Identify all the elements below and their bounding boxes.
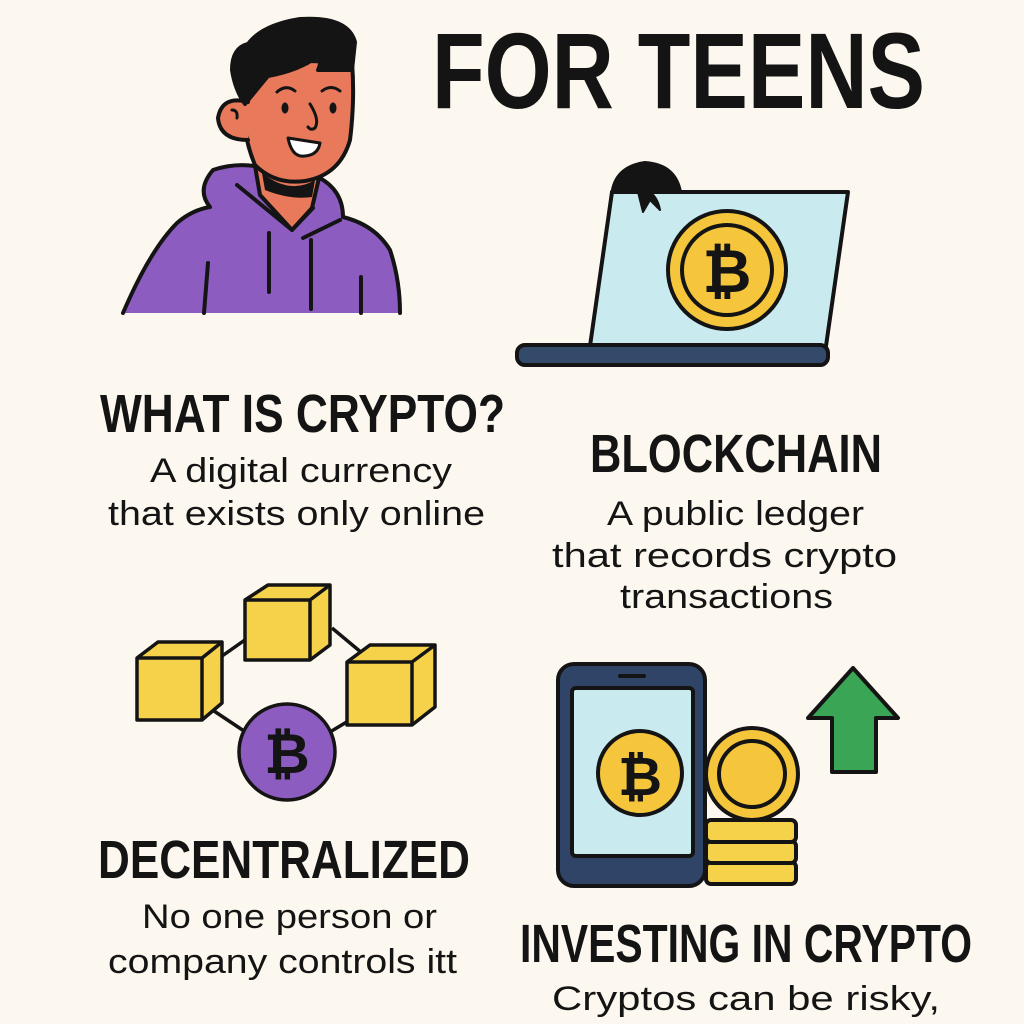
neck (254, 160, 322, 230)
heading: what is crypto: WHAT IS CRYPTO? (100, 384, 505, 444)
illustration: decentralized network: ₿ (264, 722, 310, 785)
text: blockchain: A public ledger (607, 495, 864, 533)
text: what is crypto (108, 452, 485, 533)
illustration: laptop with bitcoin (517, 163, 848, 365)
hair (232, 19, 355, 104)
ear (218, 100, 248, 140)
text: investing: Cryptos can be risky, (552, 980, 940, 1018)
coin (668, 211, 786, 329)
illustration: decentralized network (137, 585, 435, 800)
text: decentralized: company controls itt (108, 943, 458, 981)
eyes (282, 103, 288, 113)
text: decentralized: No one person or (142, 898, 437, 936)
illustration: laptop with bitcoin: ₿ (703, 238, 751, 305)
hood inner lines (237, 185, 340, 238)
face (242, 60, 353, 182)
text: blockchain: transactions (620, 578, 833, 616)
hoodie body (123, 165, 400, 313)
text: blockchain: that records crypto (552, 537, 897, 575)
text: what is crypto: that exists only online (108, 495, 485, 533)
eyebrows (277, 88, 340, 92)
text: what is crypto: A digital currency (150, 452, 452, 490)
text: blockchain (552, 495, 897, 616)
heading: decentralized: DECENTRALIZED (98, 830, 470, 890)
mouth (288, 138, 320, 156)
heading: blockchain: BLOCKCHAIN (590, 424, 882, 484)
illustration: teen in hoodie (123, 19, 400, 313)
text: decentralized (108, 898, 458, 981)
illustration: phone, coins, arrow: ₿ (618, 747, 662, 807)
illustration: phone, coins, arrow (558, 664, 898, 886)
